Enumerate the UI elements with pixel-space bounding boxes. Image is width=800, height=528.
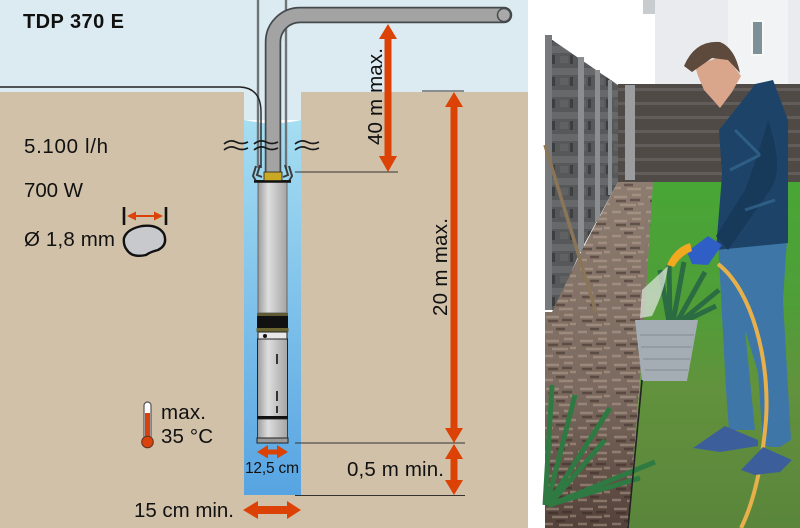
spec: flow rate: 5.100 l/h xyxy=(24,135,108,158)
reference lines xyxy=(295,91,465,496)
sky background xyxy=(0,0,528,120)
foreground plant xyxy=(545,385,655,505)
icon: particle xyxy=(124,207,166,256)
label: 35 °C: 35 °C xyxy=(161,425,213,448)
man: right shoe xyxy=(741,447,792,475)
back fence xyxy=(618,84,800,182)
bucket and plant xyxy=(635,262,719,381)
label: 0,5 m min: 0,5 m min. xyxy=(347,458,444,481)
house window xyxy=(752,21,763,55)
title: TDP 370 E xyxy=(23,11,124,33)
panel: pump diagram xyxy=(0,0,528,528)
label: 20 m max: 20 m max. xyxy=(429,218,452,316)
label: 15 cm min: 15 cm min. xyxy=(134,499,234,522)
arrow: 15 cm min xyxy=(243,501,301,519)
power cable xyxy=(0,87,261,168)
arrow: 12,5 cm width xyxy=(257,445,288,458)
side fence xyxy=(545,35,618,310)
man: hair xyxy=(684,42,740,73)
water level waves xyxy=(224,141,319,150)
pump coupling xyxy=(253,165,292,182)
discharge pipe xyxy=(273,8,510,172)
well water xyxy=(244,120,301,495)
ground xyxy=(0,92,528,528)
man: shirt xyxy=(716,80,788,250)
spec: power: 700 W xyxy=(24,179,84,202)
label: 40 m max: 40 m max. xyxy=(364,48,387,145)
arrow: 0,5 m min xyxy=(445,444,463,495)
arrow: 40 m max xyxy=(379,24,397,172)
edging xyxy=(628,380,642,528)
well ropes xyxy=(258,0,286,168)
spec: particle size: Ø 1,8 mm xyxy=(24,228,115,251)
water spray xyxy=(640,266,668,318)
icon: thermometer xyxy=(142,402,153,448)
label: max temperature: max. xyxy=(161,401,206,424)
spray gun xyxy=(667,243,692,267)
man: glove xyxy=(687,236,722,265)
garden hose xyxy=(718,264,767,528)
rake handle xyxy=(545,145,596,312)
man: jeans xyxy=(718,240,791,447)
lawn xyxy=(628,182,800,528)
man: left shoe xyxy=(693,426,758,452)
pump unit xyxy=(256,182,288,443)
panel: garden photo xyxy=(545,0,800,528)
mulch bed xyxy=(545,182,654,528)
arrow: 20 m max xyxy=(445,92,463,443)
label: 12,5 cm: 12,5 cm xyxy=(245,460,299,477)
man: head xyxy=(695,55,741,108)
house wall xyxy=(655,0,800,84)
